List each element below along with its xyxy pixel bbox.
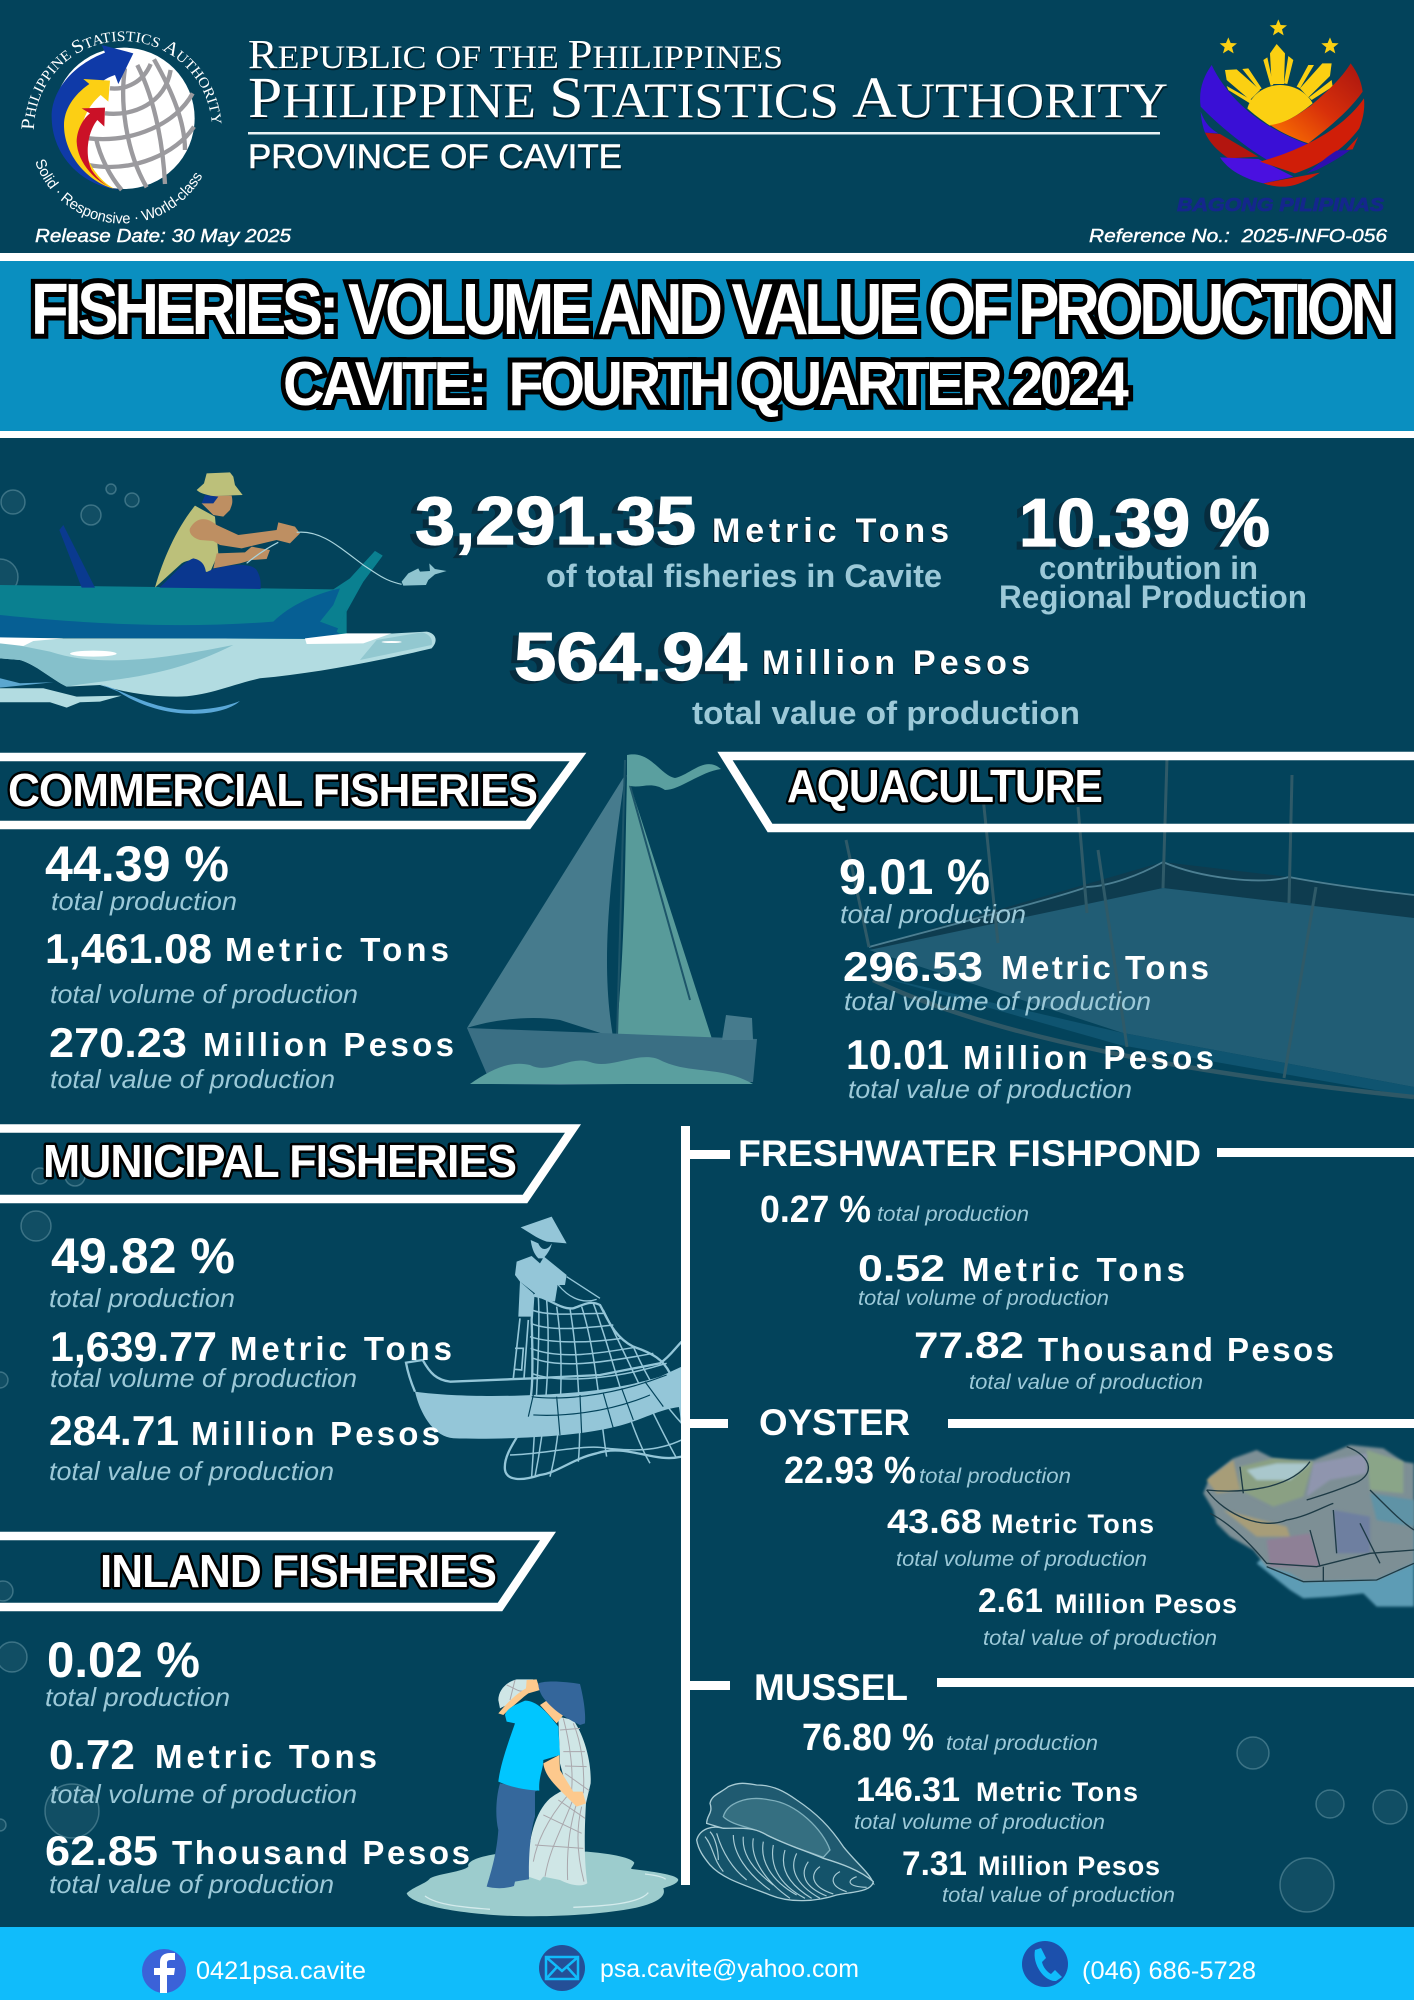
illustration: fisherman with net standing in water: [407, 1679, 678, 1916]
agency heading: [248, 31, 1168, 176]
stats: [784, 1450, 1237, 1650]
reference number: Reference No.: 2025-INFO-056: [1089, 225, 1388, 246]
stats: Million Pesos: [978, 1851, 1160, 1881]
banner: AQUACULTURE: [787, 760, 1102, 812]
icon: facebook: [142, 1949, 186, 1993]
PSA logo: [21, 31, 222, 224]
stats: Million Pesos: [191, 1415, 440, 1452]
stats: Metric Tons: [225, 931, 449, 968]
Bagong Pilipinas logo: [1177, 19, 1384, 215]
stats: 1,461.08: [45, 925, 212, 972]
stats: total volume of production: [858, 1286, 1109, 1310]
icon: email: [539, 1945, 585, 1991]
stats: total volume of production: [50, 1363, 357, 1393]
stats: 76.80 %: [802, 1717, 934, 1759]
heading: [738, 1133, 1414, 1174]
stats: Million Pesos: [1055, 1589, 1237, 1619]
stats: total value of production: [983, 1626, 1217, 1650]
stats: total production: [49, 1283, 235, 1313]
stats: total volume of production: [854, 1810, 1105, 1834]
stats: total production: [919, 1464, 1071, 1488]
total volume: of total fisheries in Cavite: [546, 558, 942, 594]
agency heading: REPUBLIC OF THE PHILIPPINES: [248, 31, 783, 77]
stats: total volume of production: [844, 986, 1151, 1016]
stats: Metric Tons: [962, 1251, 1185, 1288]
stats: 77.82: [914, 1325, 1024, 1366]
total volume: Metric Tons: [712, 512, 949, 550]
stats: 0.27 %: [760, 1189, 871, 1231]
phone number: (046) 686-5728: [1082, 1957, 1256, 1985]
stats: total value of production: [49, 1869, 334, 1899]
stats: 7.31: [902, 1845, 967, 1883]
stats: Million Pesos: [203, 1026, 454, 1063]
stats: [45, 836, 454, 1094]
regional contribution: contribution in: [1039, 550, 1258, 586]
regional contribution: [999, 485, 1307, 615]
banner: [0, 1536, 548, 1607]
PSA logo: Solid · Responsive · World-class: [36, 160, 202, 224]
total value: 564.94: [514, 619, 747, 695]
background bubbles: [0, 484, 1407, 1912]
icon: phone: [1022, 1941, 1068, 1987]
banner: [0, 1128, 573, 1199]
illustration: sailboat: [467, 754, 757, 1085]
stats: 2.61: [978, 1582, 1043, 1620]
stats: total production: [946, 1731, 1098, 1755]
panel: commercial fisheries: [0, 757, 578, 1094]
panel: inland fisheries: [0, 1536, 548, 1899]
total volume: 3,291.35: [415, 483, 696, 559]
stats: 49.82 %: [51, 1228, 235, 1284]
panel: municipal fisheries: [0, 1128, 573, 1486]
Bagong Pilipinas logo: BAGONG PILIPINAS: [1177, 195, 1384, 215]
subtitle: CAVITE: FOURTH QUARTER 2024: [283, 350, 1129, 419]
stats: 146.31: [856, 1771, 960, 1809]
heading: [759, 1402, 1414, 1443]
stats: 0.02 %: [47, 1632, 200, 1688]
illustration: net fisherman in boat: [406, 1217, 682, 1479]
stats: total volume of production: [896, 1547, 1147, 1571]
stats: 1,639.77: [50, 1323, 217, 1370]
total volume: [415, 483, 949, 594]
aquaculture branch connector: [681, 1126, 730, 1885]
illustration: oyster watercolor: [1203, 1445, 1414, 1607]
stats: 44.39 %: [45, 836, 229, 892]
stats: 22.93 %: [784, 1450, 916, 1492]
PSA logo: PHILIPPINE STATISTICS AUTHORITY: [21, 31, 222, 130]
release date: Release Date: 30 May 2025: [35, 225, 292, 246]
stats: total production: [51, 886, 237, 916]
stats: 284.71: [49, 1407, 179, 1454]
facebook handle: 0421psa.cavite: [196, 1957, 366, 1985]
banner: MUNICIPAL FISHERIES: [43, 1135, 516, 1187]
agency heading: PROVINCE OF CAVITE: [248, 138, 622, 176]
stats: [839, 849, 1214, 1104]
stats: Metric Tons: [1001, 949, 1209, 986]
stats: Million Pesos: [963, 1039, 1214, 1076]
stats: Metric Tons: [976, 1777, 1138, 1807]
stats: 0.72: [49, 1731, 135, 1778]
regional contribution: Regional Production: [999, 579, 1307, 615]
stats: total production: [45, 1682, 230, 1712]
stats: 270.23: [49, 1019, 187, 1066]
banner: [725, 756, 1414, 828]
panel: oyster: [759, 1402, 1414, 1650]
stats: 0.52: [858, 1248, 945, 1289]
banner: COMMERCIAL FISHERIES: [8, 764, 537, 816]
regional contribution: 10.39 %: [1019, 485, 1270, 561]
panel: freshwater fishpond: [738, 1133, 1414, 1394]
stats: total value of production: [848, 1074, 1132, 1104]
heading: MUSSEL: [754, 1667, 908, 1708]
email address: psa.cavite@yahoo.com: [600, 1955, 859, 1983]
banner: INLAND FISHERIES: [100, 1545, 496, 1597]
illustration: fish pond: [846, 758, 1414, 1097]
header: [21, 20, 1388, 246]
stats: total value of production: [49, 1456, 334, 1486]
footer contact bar: [0, 1927, 1414, 2000]
stats: 62.85: [45, 1827, 158, 1874]
heading: [754, 1667, 1414, 1708]
stats: [760, 1189, 1334, 1394]
stats: 9.01 %: [839, 849, 990, 905]
stats: total value of production: [50, 1064, 335, 1094]
agency heading: PHILIPPINE STATISTICS AUTHORITY: [248, 65, 1168, 130]
stats: [802, 1717, 1175, 1907]
stats: total volume of production: [50, 1779, 357, 1809]
stats: total production: [840, 899, 1026, 929]
stats: total value of production: [969, 1370, 1203, 1394]
panel: aquaculture: [725, 756, 1414, 1104]
stats: 43.68: [887, 1503, 982, 1541]
key figures: [415, 483, 1307, 731]
stats: total production: [877, 1202, 1029, 1226]
stats: [49, 1228, 452, 1486]
stats: 296.53: [843, 943, 983, 990]
panel: mussel: [754, 1667, 1414, 1907]
stats: Metric Tons: [155, 1738, 377, 1775]
stats: [45, 1632, 470, 1899]
stats: Metric Tons: [230, 1330, 452, 1367]
title banner: [0, 253, 1414, 438]
stats: Metric Tons: [991, 1509, 1154, 1539]
heading: OYSTER: [759, 1402, 910, 1443]
total value: Million Pesos: [762, 644, 1030, 682]
total value: total value of production: [692, 695, 1080, 731]
stats: Thousand Pesos: [1038, 1331, 1334, 1368]
heading: FRESHWATER FISHPOND: [738, 1133, 1201, 1174]
illustration: mussel shell: [697, 1783, 873, 1901]
stats: total value of production: [942, 1883, 1175, 1907]
stats: 10.01: [846, 1031, 949, 1078]
illustration: fisherman in boat: [0, 472, 447, 714]
stats: Thousand Pesos: [172, 1834, 470, 1871]
total value: [514, 619, 1080, 731]
stats: total volume of production: [50, 979, 358, 1009]
